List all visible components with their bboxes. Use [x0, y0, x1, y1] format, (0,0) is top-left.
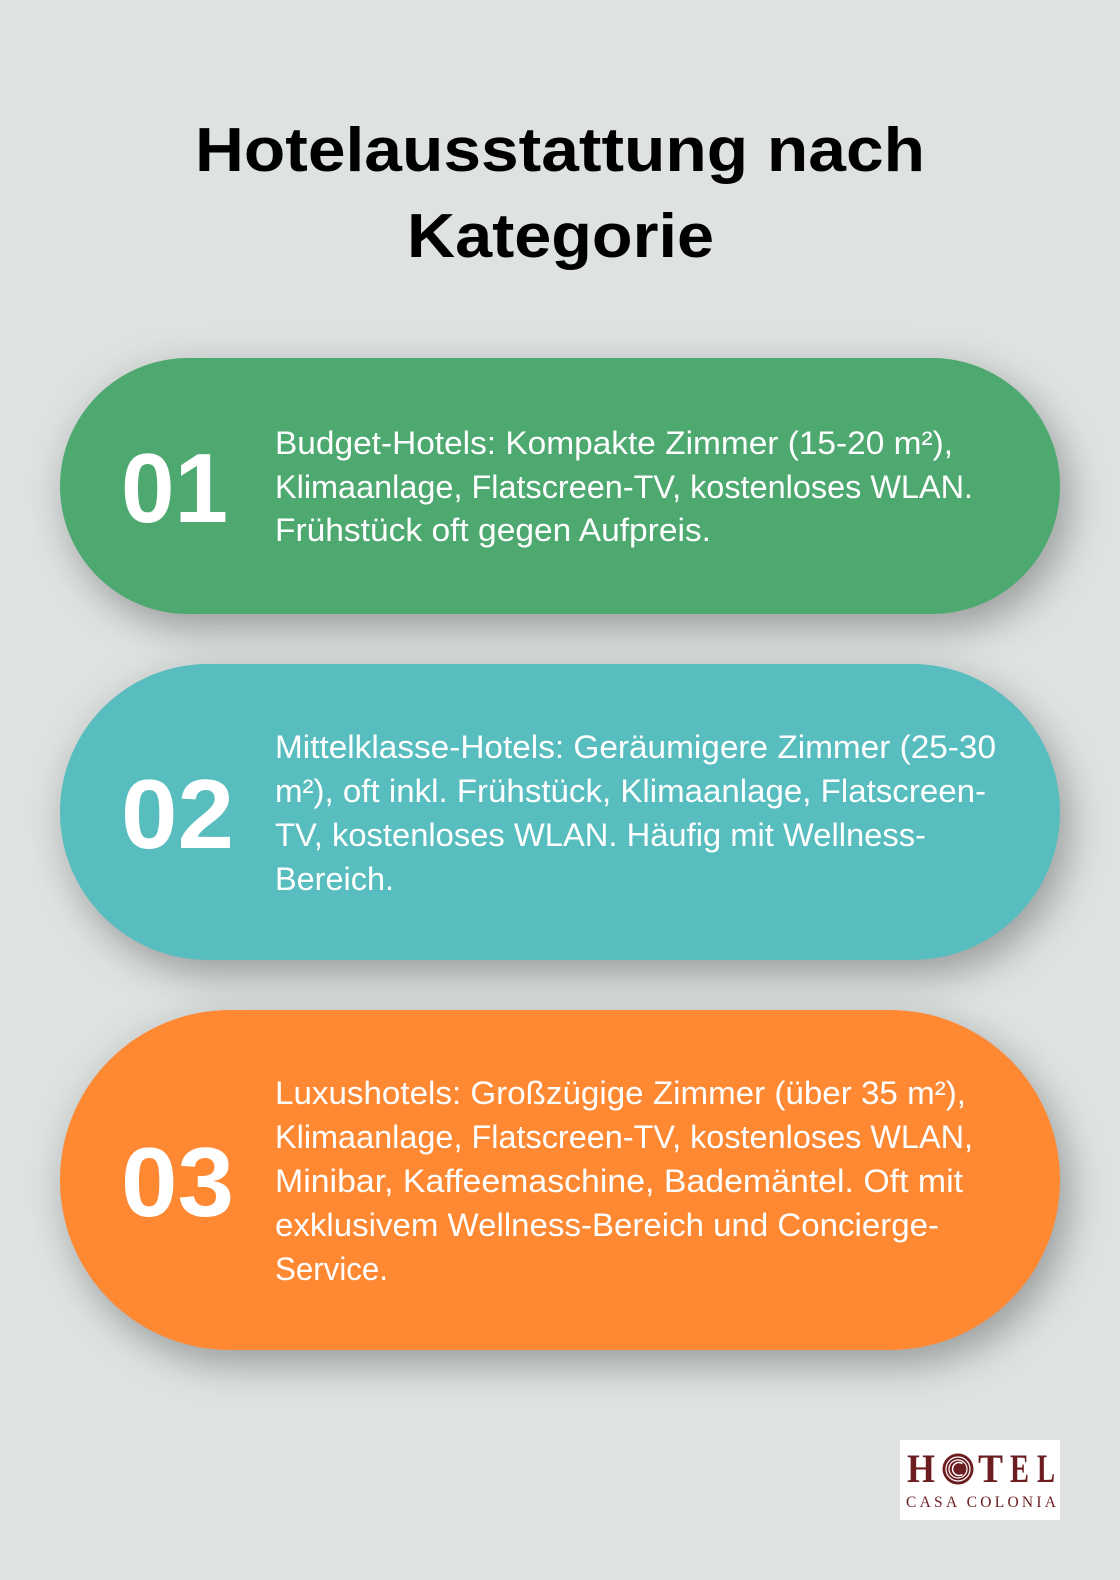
title: Hotelausstattung nach — [195, 116, 925, 185]
panel: mid-range hotels — [60, 664, 1060, 960]
text: luxury hotels description: Luxushotels: Großzügige Zimmer (über 35 m²), — [275, 1075, 966, 1111]
panel: luxury hotels — [60, 1010, 1060, 1350]
text: budget hotels description — [275, 425, 973, 548]
number 01: 01 — [121, 433, 228, 543]
text: mid-range hotels description: Mittelklasse-Hotels: Geräumigere Zimmer (25-30 — [275, 729, 996, 765]
text: luxury hotels description: Minibar, Kaffeemaschine, Bademäntel. Oft mit — [275, 1163, 963, 1199]
icon: logo ring — [942, 1454, 974, 1484]
title — [195, 116, 925, 271]
text: budget hotels description: Budget-Hotels: Kompakte Zimmer (15-20 m²), — [275, 425, 953, 461]
text: mid-range hotels description — [275, 729, 996, 897]
number 03: 03 — [121, 1127, 234, 1237]
text: mid-range hotels description: TV, kostenloses WLAN. Häufig mit Wellness- — [275, 817, 926, 853]
text: luxury hotels description — [275, 1075, 973, 1287]
logo: Hotel Casa Colonia: T — [978, 1446, 1003, 1491]
text: mid-range hotels description: Bereich. — [275, 861, 394, 897]
text: budget hotels description: Frühstück oft gegen Aufpreis. — [275, 512, 711, 548]
panel: budget hotels — [60, 358, 1060, 614]
title: Kategorie — [407, 202, 714, 271]
text: budget hotels description: Klimaanlage, Flatscreen-TV, kostenloses WLAN. — [275, 469, 973, 505]
text: luxury hotels description: exklusivem Wellness-Bereich und Concierge- — [275, 1207, 939, 1243]
text: luxury hotels description: Service. — [275, 1251, 388, 1287]
logo: Hotel Casa Colonia: CASA COLONIA — [906, 1494, 1057, 1511]
text: mid-range hotels description: m²), oft inkl. Frühstück, Klimaanlage, Flatscreen- — [275, 773, 986, 809]
logo: Hotel Casa Colonia: H — [907, 1446, 935, 1491]
text: luxury hotels description: Klimaanlage, Flatscreen-TV, kostenloses WLAN, — [275, 1119, 973, 1155]
number 02: 02 — [121, 759, 234, 869]
logo: Hotel Casa Colonia — [900, 1440, 1060, 1520]
logo: Hotel Casa Colonia: E — [1010, 1446, 1029, 1491]
